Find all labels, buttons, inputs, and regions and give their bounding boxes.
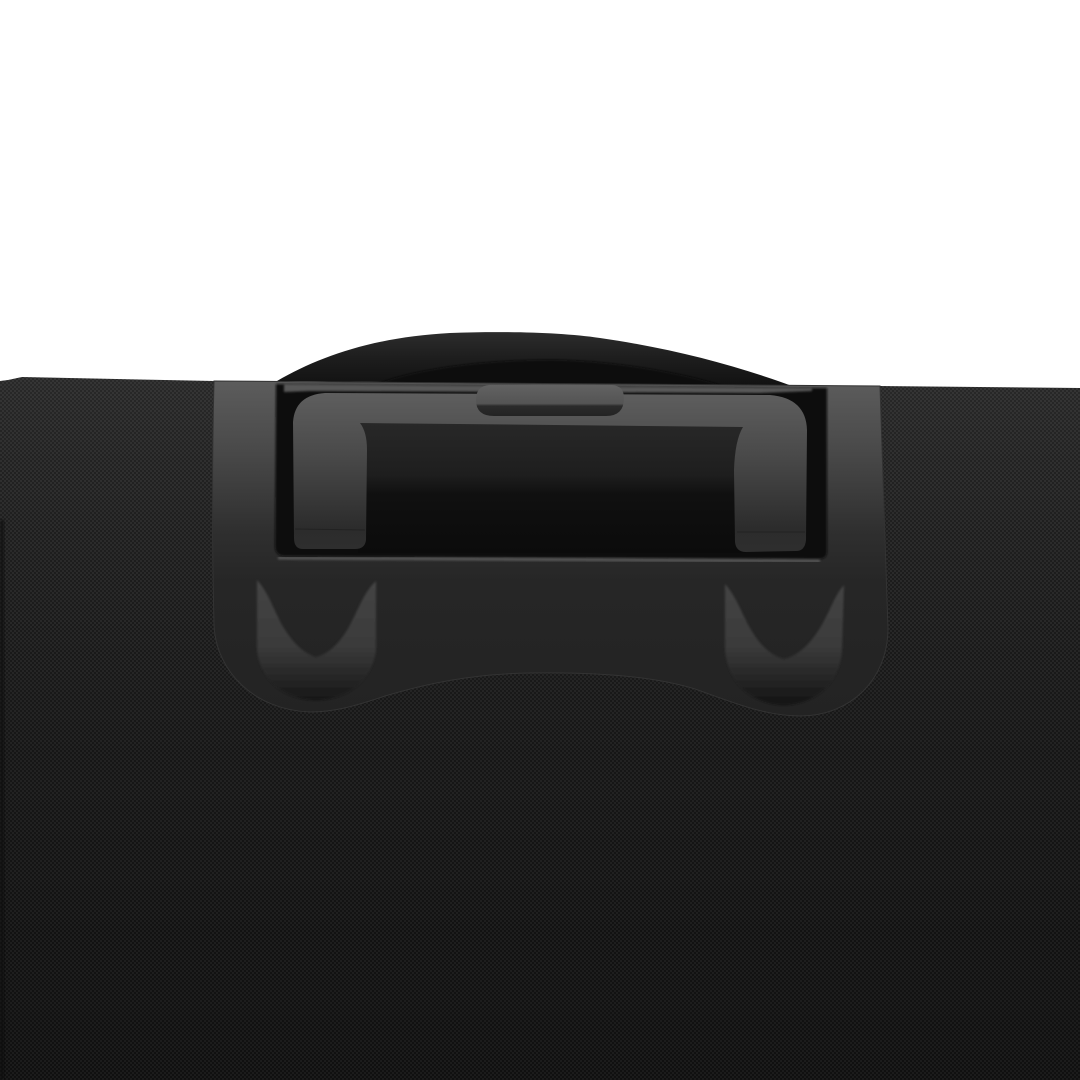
finger cup right [725,584,844,705]
finger cup left [257,580,376,700]
grip foot seam left [295,529,365,530]
handle grip bar with two arms [293,393,807,552]
top ledge of recess [284,384,812,393]
recessed grip window [358,422,746,553]
bottom ledge highlight [278,558,820,561]
release button [476,385,624,416]
handle recess [275,384,827,561]
molded handle base plate [212,381,888,716]
grip foot seam right [737,531,805,533]
carry strap arc behind handle [277,332,792,388]
suitcase fabric body [0,377,1080,1080]
